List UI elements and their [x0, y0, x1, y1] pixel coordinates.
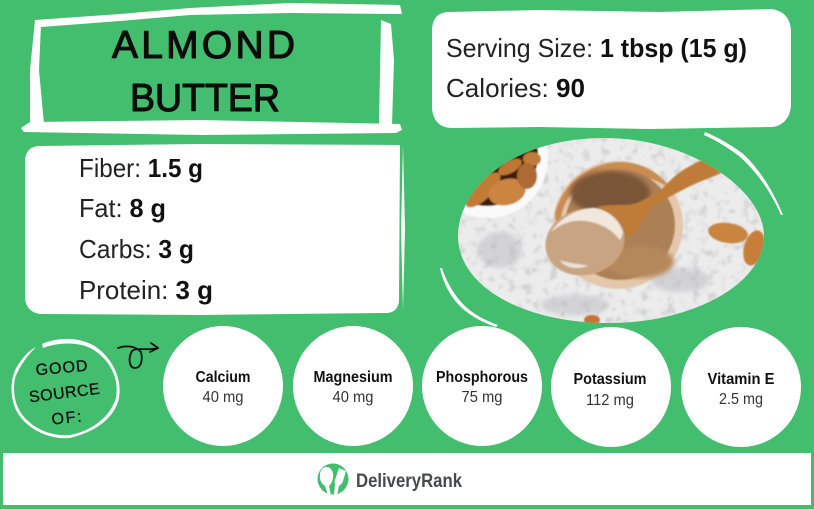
nutrient: calcium: 40 mg	[202, 389, 244, 406]
title text: BUTTER	[130, 77, 280, 120]
serving text: Serving Size: 1 tbsp (15 g)	[446, 33, 747, 63]
nutrient: phosphorous	[422, 326, 542, 446]
icon: curly arrow	[118, 343, 158, 368]
macro list: Carbs: 3 g	[79, 234, 194, 264]
panel: macronutrients	[25, 144, 405, 315]
nutrient: vitamin e	[681, 327, 801, 447]
serving text	[446, 33, 747, 103]
almond bowl	[462, 146, 548, 218]
nutrient: magnesium	[293, 326, 413, 446]
title text: ALMOND	[112, 24, 295, 67]
panel: serving size	[432, 9, 791, 129]
macro list: Protein: 3 g	[79, 275, 213, 305]
serving text: Calories: 90	[446, 73, 585, 103]
badge text: GOOD	[35, 358, 88, 379]
nutrient: calcium: Calcium	[196, 369, 250, 386]
nutrient: magnesium: 40 mg	[332, 389, 374, 406]
footer bar	[3, 453, 811, 505]
photo: almond butter	[458, 138, 764, 323]
nutrient: vitamin e: Vitamin E	[708, 371, 774, 388]
logo icon	[318, 464, 348, 495]
spoon	[544, 160, 722, 276]
nutrient: phosphorous: Phosphorous	[436, 369, 528, 386]
nutrient: magnesium: Magnesium	[314, 369, 392, 386]
nutrient: potassium: 112 mg	[586, 392, 634, 409]
almonds	[584, 220, 768, 325]
nutrient: calcium	[163, 326, 283, 446]
macro list: Fat: 8 g	[79, 193, 166, 223]
brush accents	[440, 132, 783, 327]
badge text	[28, 358, 101, 429]
badge: good source of	[11, 339, 120, 438]
logo wordmark: DeliveryRank	[356, 471, 462, 492]
title text	[112, 24, 295, 120]
macro list: Fiber: 1.5 g	[79, 153, 203, 183]
nutrient: potassium	[551, 327, 671, 447]
nutrient: phosphorous: 75 mg	[462, 389, 502, 406]
jar	[553, 161, 683, 289]
nutrient: potassium: Potassium	[574, 371, 646, 388]
title frame	[21, 3, 402, 135]
nutrient: vitamin e: 2.5 mg	[719, 391, 763, 408]
badge text: OF:	[51, 409, 82, 429]
badge text: SOURCE	[28, 381, 101, 406]
macro list	[79, 153, 213, 305]
